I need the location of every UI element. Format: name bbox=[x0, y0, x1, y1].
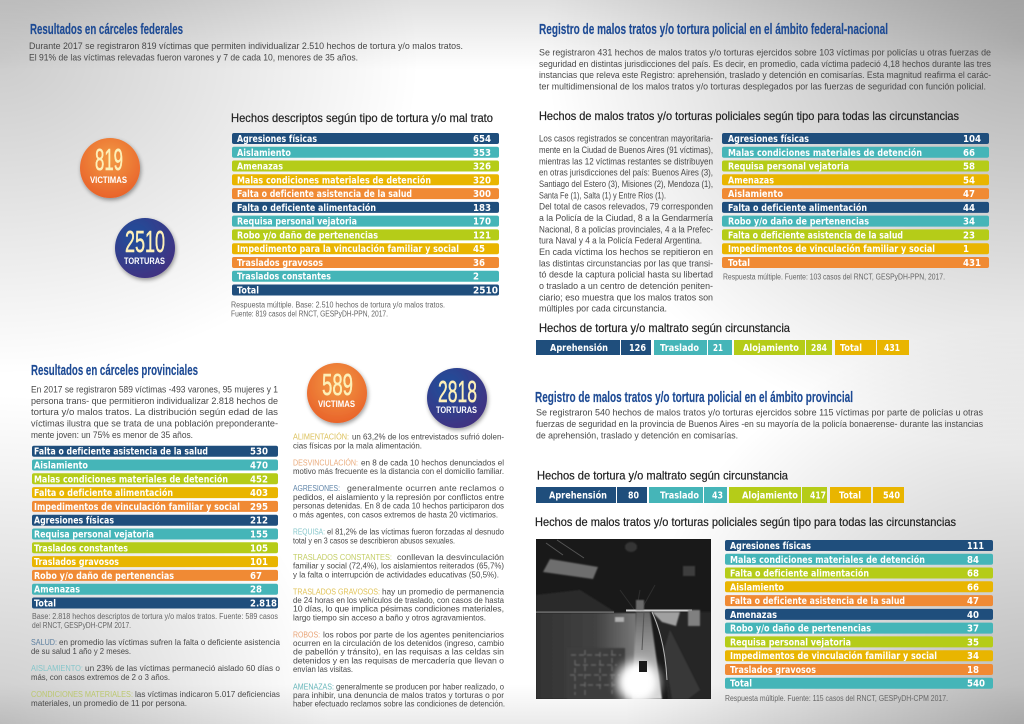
table: hechos provinciales: 212 bbox=[250, 516, 268, 527]
footnote: provincial table source bbox=[32, 612, 278, 630]
table: hechos policiales federales: 1 bbox=[963, 244, 969, 255]
table: hechos provinciales: 155 bbox=[250, 530, 268, 540]
heading: tipo provincial: Hechos de malos tratos y/o torturas policiales según tipo para todas las circunstancias bbox=[535, 516, 956, 529]
badge: 819 víctimas: 819 bbox=[95, 142, 123, 177]
table: hechos provinciales: Agresiones físicas bbox=[34, 515, 114, 527]
note: aislamiento: más, con casos extremos de 2 o 3 años. bbox=[31, 672, 170, 682]
text: federal-nacional intro: ter multidimensional de los malos tratos y/o torturas desplegados por las fuerzas de seguridad con función policial. bbox=[539, 80, 986, 92]
table: hechos policiales provinciales: 18 bbox=[967, 665, 979, 676]
note: robos: los robos por parte de los agentes penitenciarios bbox=[323, 629, 505, 639]
heading: tipo de tortura: Hechos descriptos según tipo de tortura y/o mal trato bbox=[231, 112, 493, 125]
table: hechos provinciales: Malas condiciones materiales de detención bbox=[34, 473, 228, 485]
badge: 819 víctimas bbox=[80, 138, 140, 198]
note: agresiones: pedidos, el aislamiento y la represión por conflictos entre bbox=[293, 492, 504, 502]
table: hechos provinciales: 403 bbox=[250, 488, 268, 499]
text: distribución de casos: Del total de casos relevados, 79 corresponden bbox=[539, 201, 713, 212]
table: hechos policiales federales bbox=[722, 133, 989, 269]
badge: 2818 torturas: 2818 bbox=[438, 374, 477, 409]
table: hechos policiales provinciales: Aislamiento bbox=[730, 582, 784, 593]
table: hechos federales: 300 bbox=[473, 189, 491, 200]
text: distribución de casos: En cada víctima los hechos se repitieron en bbox=[539, 246, 713, 257]
table: hechos federales: 2510 bbox=[473, 286, 498, 296]
badge: 2510 torturas: TORTURAS bbox=[124, 256, 165, 267]
table: hechos policiales provinciales: 111 bbox=[967, 541, 984, 552]
table: hechos policiales provinciales: Malas condiciones materiales de detención bbox=[730, 554, 925, 566]
table: hechos federales: 654 bbox=[473, 134, 491, 145]
note: condiciones materiales: CONDICIONES MATERIALES: bbox=[31, 689, 133, 699]
table: hechos federales bbox=[232, 133, 499, 296]
footnote: provincial police source: Respuesta múltiple. Fuente: 115 casos del RNCT, GESPyDH-CPM 2017. bbox=[725, 694, 948, 703]
note: aislamiento: un 23% de las víctimas permaneció aislado 60 días o bbox=[85, 663, 280, 673]
text: provincial intro: En 2017 se registraron 589 víctimas -493 varones, 95 mujeres y 1 bbox=[31, 384, 278, 394]
note: alimentación: un 63,2% de los entrevistados sufrió dolen- bbox=[352, 432, 504, 442]
table: hechos provinciales: 530 bbox=[250, 447, 268, 458]
table: hechos federales: Impedimento para la vinculación familiar y social bbox=[237, 243, 459, 255]
table: hechos policiales federales: 58 bbox=[963, 162, 975, 172]
note: aislamiento: AISLAMIENTO: bbox=[31, 663, 83, 673]
strip: circunstancias provincial: Total bbox=[839, 490, 861, 502]
table: hechos policiales provinciales: 66 bbox=[967, 582, 979, 593]
table: hechos policiales provinciales: 540 bbox=[967, 679, 985, 690]
text: provincial intro: mente joven: un 75% es menor de 35 años. bbox=[31, 429, 193, 440]
strip: circunstancias federal: 431 bbox=[884, 343, 900, 354]
table: hechos policiales federales: 34 bbox=[963, 217, 975, 228]
table: hechos policiales provinciales: 84 bbox=[967, 555, 979, 566]
strip: circunstancias provincial bbox=[536, 487, 904, 503]
note: robos: de pabellón y tránsito), en las requisas a las celdas sin bbox=[293, 647, 504, 657]
title: ámbito provincial: Registro de malos tratos y/o tortura policial en el ámbito provincial bbox=[535, 389, 853, 406]
table: hechos policiales provinciales: Falta o deficiente alimentación bbox=[730, 568, 869, 580]
note: salud: en promedio las víctimas sufren la falta o deficiente asistencia bbox=[59, 637, 280, 647]
strip: circunstancias provincial: 417 bbox=[810, 490, 826, 502]
table: hechos policiales federales: Robo y/o daño de pertenencias bbox=[728, 217, 869, 228]
strip: circunstancias federal: Aprehensión bbox=[550, 342, 608, 354]
photo: celda con luz en penumbra bbox=[536, 539, 711, 710]
text: distribución de casos: o traslado a un centro de detención peniten- bbox=[539, 280, 713, 291]
table: hechos policiales provinciales: Robo y/o daño de pertenencias bbox=[730, 624, 871, 635]
title: cárceles federales: Resultados en cárceles federales bbox=[30, 21, 183, 38]
note: traslados gravosos: hay un promedio de permanencia bbox=[382, 586, 504, 596]
note: alimentación: ALIMENTACIÓN: bbox=[293, 432, 349, 442]
table: hechos federales: 353 bbox=[473, 148, 491, 159]
badge: 2510 torturas: 2510 bbox=[125, 224, 165, 259]
table: hechos provinciales: Traslados constantes bbox=[34, 543, 128, 554]
table: hechos policiales federales: 104 bbox=[963, 134, 981, 145]
table: hechos policiales provinciales bbox=[725, 540, 993, 690]
heading: según circunstancia provincial: Hechos de tortura y/o maltrato según circunstancia bbox=[537, 470, 789, 482]
table: hechos provinciales: Total bbox=[34, 598, 56, 610]
note: condiciones materiales: las víctimas indicaron 5.017 deficiencias bbox=[135, 689, 281, 699]
table: hechos policiales federales: Falta o deficiente alimentación bbox=[728, 202, 867, 214]
table: hechos policiales federales: Aislamiento bbox=[728, 189, 783, 200]
text: provincial police intro: de aprehensión, traslado y detención en comisarías. bbox=[536, 430, 738, 440]
table: hechos provinciales: 2.818 bbox=[250, 598, 277, 610]
text: distribución de casos: Los casos registrados se concentran mayoritaria- bbox=[539, 133, 713, 144]
note: requisa: el 81,2% de las víctimas fueron forzadas al desnudo bbox=[327, 526, 504, 536]
text: distribución de casos bbox=[539, 133, 714, 314]
text: federal-nacional intro: instancias que releva este Registro: aprehensión, traslado y detención en comisarías. Esta magnitud reafirma el carác- bbox=[539, 69, 991, 80]
table: hechos federales: 170 bbox=[473, 217, 491, 228]
note: agresiones: AGRESIONES: bbox=[293, 483, 340, 493]
text: federal intro bbox=[29, 40, 463, 62]
table: hechos policiales federales: 44 bbox=[963, 203, 975, 214]
table: hechos policiales federales: Amenazas bbox=[728, 175, 774, 186]
text: provincial intro bbox=[31, 384, 278, 440]
footnote: federal table source: Fuente: 819 casos del RNCT, GESPyDH-PPN, 2017. bbox=[231, 310, 388, 318]
table: hechos provinciales: 105 bbox=[250, 543, 268, 554]
footnote: federal table source bbox=[231, 300, 445, 318]
note: amenazas: generalmente se producen por haber realizado, o bbox=[336, 681, 504, 691]
note: amenazas: haber efectuado reclamos sobre las condiciones de detención. bbox=[293, 699, 505, 709]
note: robos: ocurren en la circulación de los detenidos (ingreso, cambio bbox=[293, 638, 504, 648]
table: hechos provinciales: 470 bbox=[250, 460, 268, 472]
table: hechos policiales federales: 66 bbox=[963, 148, 975, 159]
table: hechos federales: 320 bbox=[473, 175, 491, 186]
title: cárceles provinciales: Resultados en cárceles provinciales bbox=[31, 362, 198, 379]
note: agresiones: o más agentes, con casos extremos de hasta 20 victimarios. bbox=[293, 509, 498, 519]
table: hechos provinciales: Falta o deficiente alimentación bbox=[34, 487, 173, 499]
table: hechos federales: Total bbox=[237, 286, 259, 296]
note: alimentación bbox=[293, 432, 504, 450]
strip: circunstancias provincial: 540 bbox=[883, 490, 900, 502]
table: hechos policiales provinciales: Requisa personal vejatoria bbox=[730, 637, 851, 648]
text: distribución de casos: Nacional, 8 a policías provinciales, 4 a la Prefec- bbox=[539, 223, 713, 234]
note: traslados gravosos: 10 días, lo que implica pésimas condiciones materiales, bbox=[293, 604, 504, 614]
table: hechos federales: Falta o deficiente asistencia de la salud bbox=[237, 189, 412, 200]
text: distribución de casos: mientras las 12 víctimas restantes se distribuyen bbox=[539, 155, 713, 166]
table: hechos policiales federales: 23 bbox=[963, 230, 975, 241]
text: provincial police intro: fuerzas de seguridad en la provincia de Buenos Aires -en su mayoría de la policía bonaerense- durante las instancias bbox=[536, 418, 983, 429]
heading: tipo para todas las circunstancias: Hechos de malos tratos y/o torturas policiales según tipo para todas las circunstancias bbox=[539, 110, 959, 123]
table: hechos policiales provinciales: 47 bbox=[967, 596, 979, 607]
note: requisa bbox=[293, 526, 504, 545]
note: desvinculación: en 8 de cada 10 hechos denunciados el bbox=[361, 457, 504, 467]
table: hechos policiales federales: 431 bbox=[963, 258, 981, 269]
table: hechos federales: Traslados constantes bbox=[237, 272, 331, 283]
table: hechos provinciales: Falta o deficiente asistencia de la salud bbox=[34, 447, 208, 458]
table: hechos provinciales: 295 bbox=[250, 502, 268, 513]
panel: registro federal-nacional bbox=[536, 21, 991, 355]
table: hechos policiales provinciales: Traslados gravosos bbox=[730, 665, 816, 676]
table: hechos provinciales: Traslados gravosos bbox=[34, 557, 119, 568]
note: amenazas: para inhibir, una denuncia de malos tratos y torturas o por bbox=[293, 690, 504, 700]
text: distribución de casos: Santiago del Estero (3), Misiones (2), Mendoza (1), bbox=[539, 178, 713, 189]
text: distribución de casos: múltiples por cada circunstancia. bbox=[539, 303, 667, 314]
note: desvinculación: DESVINCULACIÓN: bbox=[293, 457, 358, 467]
strip: circunstancias federal: 21 bbox=[713, 343, 723, 354]
strip: circunstancias provincial: 43 bbox=[712, 490, 723, 502]
table: hechos provinciales: 67 bbox=[250, 571, 262, 582]
strip: circunstancias federal: 126 bbox=[629, 343, 646, 354]
table: hechos policiales federales: Requisa personal vejatoria bbox=[728, 162, 849, 172]
table: hechos policiales federales: 47 bbox=[963, 189, 975, 200]
text: provincial intro: persona trans- que permitieron individualizar 2.818 hechos de bbox=[31, 395, 278, 406]
text: federal intro: Durante 2017 se registraron 819 víctimas que permiten individualizar 2.510 hechos de tortura y/o malos tratos. bbox=[29, 40, 463, 51]
note: traslados gravosos: TRASLADOS GRAVOSOS: bbox=[293, 586, 380, 596]
note: agresiones bbox=[293, 483, 505, 519]
table: hechos federales: 45 bbox=[473, 244, 485, 255]
panel: resultados en cárceles provinciales bbox=[31, 362, 505, 709]
note: agresiones: generalmente ocurren ante reclamos o bbox=[347, 483, 504, 493]
note: desvinculación bbox=[293, 457, 504, 476]
text: provincial intro: tortura y/o malos tratos. La distribución según edad de las bbox=[31, 406, 278, 417]
note: salud: de su salud 1 año y 2 meses. bbox=[31, 646, 131, 656]
text: distribución de casos: las distintas circunstancias por las que transi- bbox=[539, 257, 713, 268]
badge: 2510 torturas bbox=[115, 218, 175, 278]
table: hechos policiales federales: Impedimentos de vinculación familiar y social bbox=[728, 243, 935, 255]
table: hechos federales: Amenazas bbox=[237, 162, 283, 172]
strip: circunstancias federal: Alojamiento bbox=[743, 343, 799, 354]
badge: 2818 torturas bbox=[427, 368, 487, 428]
text: distribución de casos: ciario; eso muestra que los malos tratos son bbox=[539, 291, 713, 302]
footnote: federal-nacional source: Respuesta múltiple. Fuente: 103 casos del RNCT, GESPyDH-PPN, 2017. bbox=[723, 272, 945, 282]
panel: registro provincial bbox=[535, 389, 993, 710]
note: condiciones materiales bbox=[31, 689, 281, 708]
note: amenazas: AMENAZAS: bbox=[293, 681, 334, 691]
text: distribución de casos: tura Naval y 4 a la Policía Federal Argentina. bbox=[539, 235, 702, 246]
table: hechos federales: Requisa personal vejatoria bbox=[237, 217, 357, 228]
panel: resultados en cárceles federales bbox=[29, 21, 499, 318]
table: hechos provinciales: 101 bbox=[250, 557, 268, 568]
table: hechos policiales federales: Agresiones físicas bbox=[728, 133, 809, 145]
badge: 589 víctimas bbox=[307, 363, 367, 423]
text: distribución de casos: mente en la Ciudad de Buenos Aires (91 víctimas), bbox=[539, 144, 713, 155]
table: hechos provinciales bbox=[32, 446, 278, 610]
table: hechos federales: 2 bbox=[473, 272, 479, 283]
strip: circunstancias provincial: Alojamiento bbox=[742, 490, 798, 502]
text: provincial intro: víctimas ilustra que se trata de una población preponderante- bbox=[31, 418, 278, 428]
note: traslados gravosos: largo tiempo sin acceso a baño y otros agravamientos. bbox=[293, 612, 486, 622]
note: salud: SALUD: bbox=[31, 637, 57, 647]
note: requisa: total y en 3 casos se describieron abusos sexuales. bbox=[293, 535, 455, 545]
table: hechos provinciales: Aislamiento bbox=[34, 460, 88, 472]
note: robos: ROBOS: bbox=[293, 629, 320, 639]
note: traslados constantes: y la falta o interrupción de actividades educativas (50,5%). bbox=[293, 569, 499, 579]
table: hechos federales: Aislamiento bbox=[237, 148, 291, 159]
note: traslados gravosos bbox=[293, 586, 504, 622]
note: amenazas bbox=[293, 681, 505, 709]
table: hechos provinciales: 452 bbox=[250, 474, 268, 485]
table: hechos policiales provinciales: Agresiones físicas bbox=[730, 540, 811, 552]
table: hechos federales: Malas condiciones materiales de detención bbox=[237, 174, 431, 186]
table: hechos provinciales: 28 bbox=[250, 585, 262, 596]
table: hechos provinciales: Impedimentos de vinculación familiar y social bbox=[34, 501, 240, 513]
text: federal intro: El 91% de las víctimas relevadas fueron varones y 7 de cada 10, menores de 35 años. bbox=[29, 52, 358, 62]
badge: 589 víctimas: 589 bbox=[322, 367, 353, 402]
heading: según circunstancia federal: Hechos de tortura y/o maltrato según circunstancia bbox=[539, 322, 791, 335]
table: hechos policiales federales: Total bbox=[728, 258, 750, 269]
footnote: provincial table source: del RNCT, GESPyDH-CPM 2017. bbox=[32, 621, 131, 630]
text: provincial police intro: Se registraron 540 hechos de malos tratos y/o torturas ejercidos sobre 115 víctimas por parte de policías u otras bbox=[536, 407, 983, 418]
table: hechos policiales provinciales: Falta o deficiente asistencia de la salud bbox=[730, 596, 905, 607]
strip: circunstancias federal: 284 bbox=[811, 343, 827, 354]
strip: circunstancias provincial: Aprehensión bbox=[549, 490, 607, 502]
text: distribución de casos: Santa Fe (1), Salta (1) y Entre Ríos (1). bbox=[539, 189, 666, 200]
text: federal-nacional intro: Se registraron 431 hechos de malos tratos y/o torturas ejercidos sobre 103 víctimas por policías u otras fuerzas de bbox=[539, 46, 991, 58]
text: federal-nacional intro bbox=[539, 46, 991, 92]
note: robos: detenidos y en las requisas de mercadería que llevan o bbox=[293, 655, 504, 665]
table: hechos federales: 183 bbox=[473, 203, 491, 214]
note: traslados constantes: familiar y social (72,4%), los aislamientos reiterados (65,7%) bbox=[293, 561, 504, 571]
note: condiciones materiales: materiales, un promedio de 11 por persona. bbox=[31, 698, 187, 708]
table: hechos federales: 326 bbox=[473, 162, 491, 172]
table: hechos policiales provinciales: 35 bbox=[967, 637, 979, 648]
text: federal-nacional intro: seguridad en distintas jurisdicciones del país. Es decir, en promedio, cada víctima padeció 4,18 hechos durante las tres bbox=[539, 58, 991, 69]
table: hechos policiales provinciales: Impedimentos de vinculación familiar y social bbox=[730, 650, 937, 662]
table: hechos provinciales: Robo y/o daño de pertenencias bbox=[34, 571, 174, 582]
table: hechos federales: Agresiones físicas bbox=[237, 133, 317, 145]
note: desvinculación: motivo más frecuente es la distancia con el domicilio familiar. bbox=[293, 466, 504, 476]
note: traslados constantes: TRASLADOS CONSTANTES: bbox=[293, 552, 392, 562]
table: hechos policiales provinciales: 40 bbox=[967, 610, 979, 621]
footnote: federal table source: Respuesta múltiple. Base: 2.510 hechos de tortura y/o malos tratos. bbox=[231, 300, 445, 310]
text: distribución de casos: a la Policía de la Ciudad, 8 a la Gendarmería bbox=[539, 212, 714, 223]
table: hechos federales: 36 bbox=[473, 258, 485, 269]
note: aislamiento bbox=[31, 663, 280, 682]
table: hechos federales: 121 bbox=[473, 230, 491, 241]
table: hechos policiales federales: Falta o deficiente asistencia de la salud bbox=[728, 230, 903, 241]
text: distribución de casos: en otras jurisdicciones del país: Buenos Aires (3), bbox=[539, 167, 713, 178]
note: traslados gravosos: de 24 horas en los vehículos de traslado, con casos de hasta bbox=[293, 595, 504, 605]
strip: circunstancias federal bbox=[536, 340, 909, 355]
table: hechos policiales provinciales: Amenazas bbox=[730, 610, 777, 621]
table: hechos federales: Robo y/o daño de pertenencias bbox=[237, 230, 378, 241]
table: hechos policiales federales: 54 bbox=[963, 175, 975, 186]
table: hechos federales: Falta o deficiente alimentación bbox=[237, 202, 376, 214]
note: agresiones: personas detenidas. En 8 de cada 10 hechos participaron dos bbox=[293, 501, 505, 511]
note: traslados constantes: conllevan la desvinculación bbox=[397, 552, 504, 562]
note: salud bbox=[31, 637, 280, 656]
note: robos: envían las visitas. bbox=[293, 664, 353, 674]
strip: circunstancias provincial: 80 bbox=[628, 490, 639, 502]
table: hechos policiales provinciales: 37 bbox=[967, 624, 979, 635]
note: robos bbox=[293, 629, 505, 674]
badge: 589 víctimas: VICTIMAS bbox=[318, 399, 355, 410]
strip: circunstancias federal: Traslado bbox=[660, 343, 699, 354]
note: alimentación: cias físicas por la mala alimentación. bbox=[293, 440, 422, 450]
table: hechos policiales provinciales: Total bbox=[730, 679, 752, 690]
table: hechos policiales provinciales: 34 bbox=[967, 651, 979, 662]
table: hechos policiales provinciales: 68 bbox=[967, 568, 979, 580]
text: distribución de casos: tó desde la captura policial hasta su libertad bbox=[539, 269, 713, 280]
table: hechos provinciales: Requisa personal vejatoria bbox=[34, 530, 154, 540]
footnote: provincial table source: Base: 2.818 hechos descriptos de tortura y/o malos tratos. Fuente: 589 casos bbox=[32, 612, 278, 621]
table: hechos provinciales: Amenazas bbox=[34, 585, 80, 596]
note: requisa: REQUISA: bbox=[293, 526, 325, 536]
note: traslados constantes bbox=[293, 552, 504, 579]
table: hechos policiales federales: Malas condiciones materiales de detención bbox=[728, 147, 922, 159]
badge: 819 víctimas: VICTIMAS bbox=[90, 175, 127, 186]
strip: circunstancias federal: Total bbox=[840, 343, 862, 354]
strip: circunstancias provincial: Traslado bbox=[660, 490, 699, 502]
badge: 2818 torturas: TORTURAS bbox=[436, 405, 477, 416]
text: provincial police intro bbox=[536, 407, 983, 440]
table: hechos federales: Traslados gravosos bbox=[237, 258, 323, 269]
